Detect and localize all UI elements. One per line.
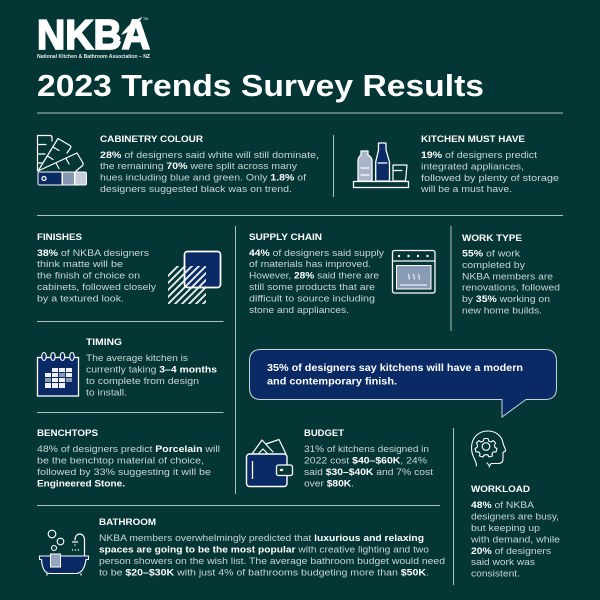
icon: bathtub	[40, 530, 88, 575]
text: workload: but keeping up	[471, 523, 540, 534]
text: benchtops	[37, 427, 220, 490]
logo: NKBA: TM	[143, 17, 148, 21]
icon: calendar	[38, 352, 78, 396]
text: work type: completed by	[462, 260, 525, 271]
text: bathroom: to be $20–$30K with just 4% of bathrooms budgeting more than $50K.	[99, 568, 429, 578]
text: cabinetry colour: 28% of designers said white will still dominate,	[100, 150, 319, 161]
text: bathroom: person showers on the wish list. The average bathroom budget would need	[99, 556, 445, 567]
text: bathroom: BATHROOM	[99, 516, 156, 527]
text: kitchen must have: integrated appliances,	[421, 162, 524, 172]
text: supply chain	[249, 231, 384, 316]
text: timing: currently taking 3–4 months	[86, 364, 217, 376]
icon: bottles on shelf	[354, 143, 408, 188]
text: supply chain: 44% of designers said supply	[249, 248, 384, 259]
text: work type	[462, 232, 560, 316]
logo: NKBA: National Kitchen & Bathroom Association – NZ	[37, 54, 150, 60]
icon: matte and textured squares	[168, 250, 222, 304]
text: timing: The average kitchen is	[86, 353, 188, 364]
text: supply chain: stone and appliances.	[249, 305, 349, 316]
text: kitchen must have: 19% of designers predict	[421, 150, 537, 161]
text: supply chain: difficult to source including	[249, 294, 375, 304]
text: kitchen must have	[420, 133, 559, 195]
text: finishes: think matte will be	[37, 259, 123, 270]
icon: wallet	[246, 440, 292, 486]
text: finishes: FINISHES	[37, 231, 82, 242]
text: workload: 48% of NKBA	[471, 500, 535, 511]
text: kitchen must have: will be a must have.	[420, 184, 512, 195]
text: workload: with demand, while	[470, 534, 560, 546]
text: timing: to complete from design	[86, 376, 199, 387]
text: benchtops: followed by 33% suggesting it will be	[37, 467, 211, 478]
text: kitchen must have: KITCHEN MUST HAVE	[421, 133, 525, 144]
text: finishes: the finish of choice on	[37, 270, 140, 282]
text: timing: TIMING	[86, 336, 122, 347]
text: work type: NKBA members are	[462, 272, 553, 282]
text: work type: renovations, followed	[462, 282, 560, 294]
text: bathroom: spaces are going to be the most popular with creative lighting and two	[99, 544, 429, 556]
text: supply chain: SUPPLY CHAIN	[249, 231, 322, 242]
text: workload: 20% of designers	[471, 546, 551, 557]
text: timing: to install.	[86, 388, 127, 398]
text: workload: WORKLOAD	[471, 483, 530, 494]
text: work type: new home builds.	[462, 306, 542, 316]
icon: head with gear	[472, 431, 506, 467]
text: work type: WORK TYPE	[462, 232, 522, 243]
text: budget: 31% of kitchens designed in	[304, 444, 429, 455]
text: benchtops: be the benchtop material of choice,	[37, 456, 204, 466]
callout: modern and contemporary: 35% of designers say kitchens will have a modern	[267, 363, 523, 374]
callout: modern and contemporary: and contemporary finish.	[267, 376, 397, 388]
text: supply chain: still some products that are	[249, 282, 375, 293]
text: finishes	[37, 231, 156, 304]
text: workload: consistent.	[471, 568, 520, 580]
text: benchtops: 48% of designers predict Porcelain will	[37, 444, 220, 455]
text: work type: by 35% working on	[462, 294, 550, 305]
icon: colour swatch fan	[38, 136, 87, 186]
text: supply chain: of materials has improved.	[249, 259, 371, 270]
text: budget: BUDGET	[304, 427, 344, 438]
text: supply chain: However, 28% said there are	[249, 270, 379, 282]
text: kitchen must have: followed by plenty of storage	[421, 173, 559, 184]
text: benchtops: Engineered Stone.	[37, 478, 125, 490]
text: cabinetry colour: designers suggested black was on trend.	[100, 184, 292, 195]
text: cabinetry colour: hues including blue and green. Only 1.8% of	[100, 172, 306, 184]
logo: NKBA: NKBA	[37, 11, 150, 58]
text: budget: 2022 cost $40–$60K , 24%	[304, 456, 427, 466]
text: budget: said $30–$40K and 7% cost	[304, 467, 433, 478]
title: 2023 Trends Survey Results	[37, 68, 484, 103]
text: workload	[470, 483, 560, 580]
text: finishes: by a textured look.	[37, 294, 124, 304]
text: budget: over $80K.	[304, 478, 354, 490]
text: bathroom: NKBA members overwhelmingly predicted that luxurious and relaxing	[99, 533, 424, 544]
text: budget	[304, 427, 433, 490]
text: workload: said work was	[471, 557, 535, 568]
text: bathroom	[99, 516, 445, 578]
text: cabinetry colour: the remaining 70% were split across many	[100, 161, 297, 172]
text: benchtops: BENCHTOPS	[37, 427, 98, 438]
text: workload: designers are busy,	[471, 512, 559, 522]
text: timing	[86, 336, 217, 398]
callout: modern and contemporary	[250, 350, 556, 417]
text: finishes: cabinets, followed closely	[37, 282, 156, 293]
text: work type: 55% of work	[462, 248, 520, 260]
text: finishes: 38% of NKBA designers	[37, 248, 149, 259]
text: cabinetry colour	[100, 133, 319, 195]
icon: oven	[392, 250, 435, 293]
text: cabinetry colour: CABINETRY COLOUR	[100, 133, 203, 144]
